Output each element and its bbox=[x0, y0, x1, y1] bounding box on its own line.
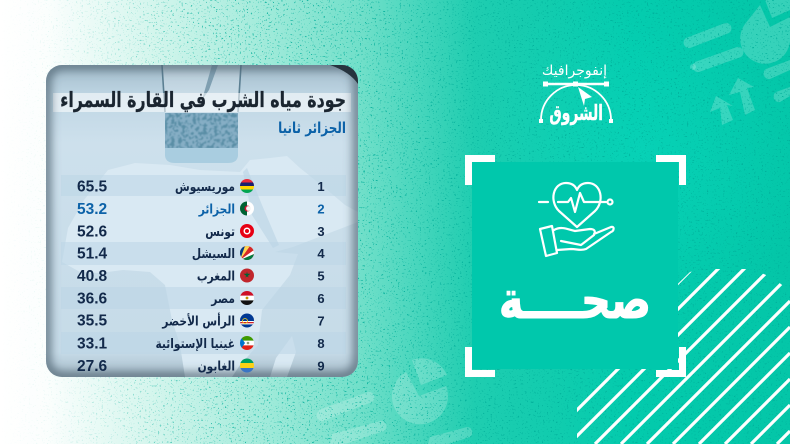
row 7: Cape Verde bbox=[77, 312, 325, 330]
water glass bbox=[162, 65, 241, 163]
row 5: Morocco: 5 bbox=[317, 268, 325, 284]
row 4: Seychelles: 4 bbox=[317, 246, 325, 261]
row 9: Gabon: الغابون bbox=[198, 358, 235, 375]
decorative shapes: top right bbox=[684, 0, 790, 125]
panel: health category bbox=[468, 158, 682, 374]
decorative shapes: bottom pie and bars bbox=[317, 358, 472, 444]
subtitle: الجزائر ثانيا bbox=[278, 120, 346, 137]
row 3: Tunisia: تونس bbox=[205, 224, 235, 240]
row 9: Gabon: 9 bbox=[317, 358, 325, 374]
row 4: Seychelles: 51.4 bbox=[77, 246, 108, 262]
row 3: Tunisia: 3 bbox=[317, 224, 325, 239]
row 5: Morocco: 40.8 bbox=[77, 268, 108, 285]
map of Africa and Arabia bbox=[62, 156, 358, 377]
row 9: Gabon: 27.6 bbox=[77, 358, 108, 375]
panel: water quality table bbox=[46, 65, 358, 377]
panel title: جودة مياه الشرب في القارة السمراء bbox=[60, 89, 346, 113]
logo caption: إنفوجرافيك bbox=[542, 63, 607, 79]
red sea bbox=[243, 168, 279, 248]
row 5: Morocco bbox=[77, 268, 325, 285]
row 2: Algeria bbox=[77, 201, 325, 218]
row 4: Seychelles bbox=[78, 246, 325, 260]
row 5: Morocco: المغرب bbox=[197, 268, 235, 285]
heading: health: صحــــة bbox=[499, 271, 651, 331]
row 3: Tunisia: 52.6 bbox=[77, 224, 108, 240]
row 3: Tunisia bbox=[77, 224, 325, 240]
row 6: Egypt: 6 bbox=[317, 291, 325, 306]
logo wordmark: الشروق bbox=[549, 101, 603, 126]
row 1: Mauritius bbox=[77, 178, 325, 196]
logo: Shorouk infographic bbox=[539, 63, 613, 126]
row 2: Algeria: الجزائر bbox=[198, 201, 235, 218]
row 8: Equatorial Guinea: 33.1 bbox=[77, 336, 108, 352]
row 2: Algeria: 2 bbox=[317, 202, 325, 216]
frame corners bbox=[468, 158, 682, 374]
row 6: Egypt bbox=[77, 290, 325, 308]
row 8: Equatorial Guinea bbox=[77, 336, 325, 352]
row 1: Mauritius: 1 bbox=[317, 179, 325, 194]
row 6: Egypt: مصر bbox=[210, 291, 235, 307]
row 6: Egypt: 36.6 bbox=[77, 290, 108, 308]
row 8: Equatorial Guinea: 8 bbox=[317, 336, 325, 351]
row 1: Mauritius: موريسيوش bbox=[175, 179, 235, 195]
row 1: Mauritius: 65.5 bbox=[77, 178, 108, 196]
logo bezier handle and arc bbox=[539, 82, 613, 123]
diagonal white stripes bbox=[570, 260, 790, 444]
title band bbox=[53, 93, 351, 112]
row 7: Cape Verde: 7 bbox=[317, 314, 325, 328]
row 7: Cape Verde: 35.5 bbox=[77, 312, 108, 330]
row 2: Algeria: 53.2 bbox=[77, 201, 107, 218]
dark corner bbox=[330, 65, 358, 84]
ranking table bbox=[77, 178, 325, 375]
row 9: Gabon bbox=[77, 358, 325, 375]
icon: heart in hand bbox=[539, 183, 614, 256]
row 8: Equatorial Guinea: غينيا الإستوائية bbox=[155, 336, 235, 352]
row 7: Cape Verde: الرأس الأخضر bbox=[161, 312, 235, 330]
row 4: Seychelles: السيشل bbox=[192, 246, 235, 261]
panel edge shading bbox=[46, 65, 358, 377]
table row bands bbox=[61, 175, 346, 354]
